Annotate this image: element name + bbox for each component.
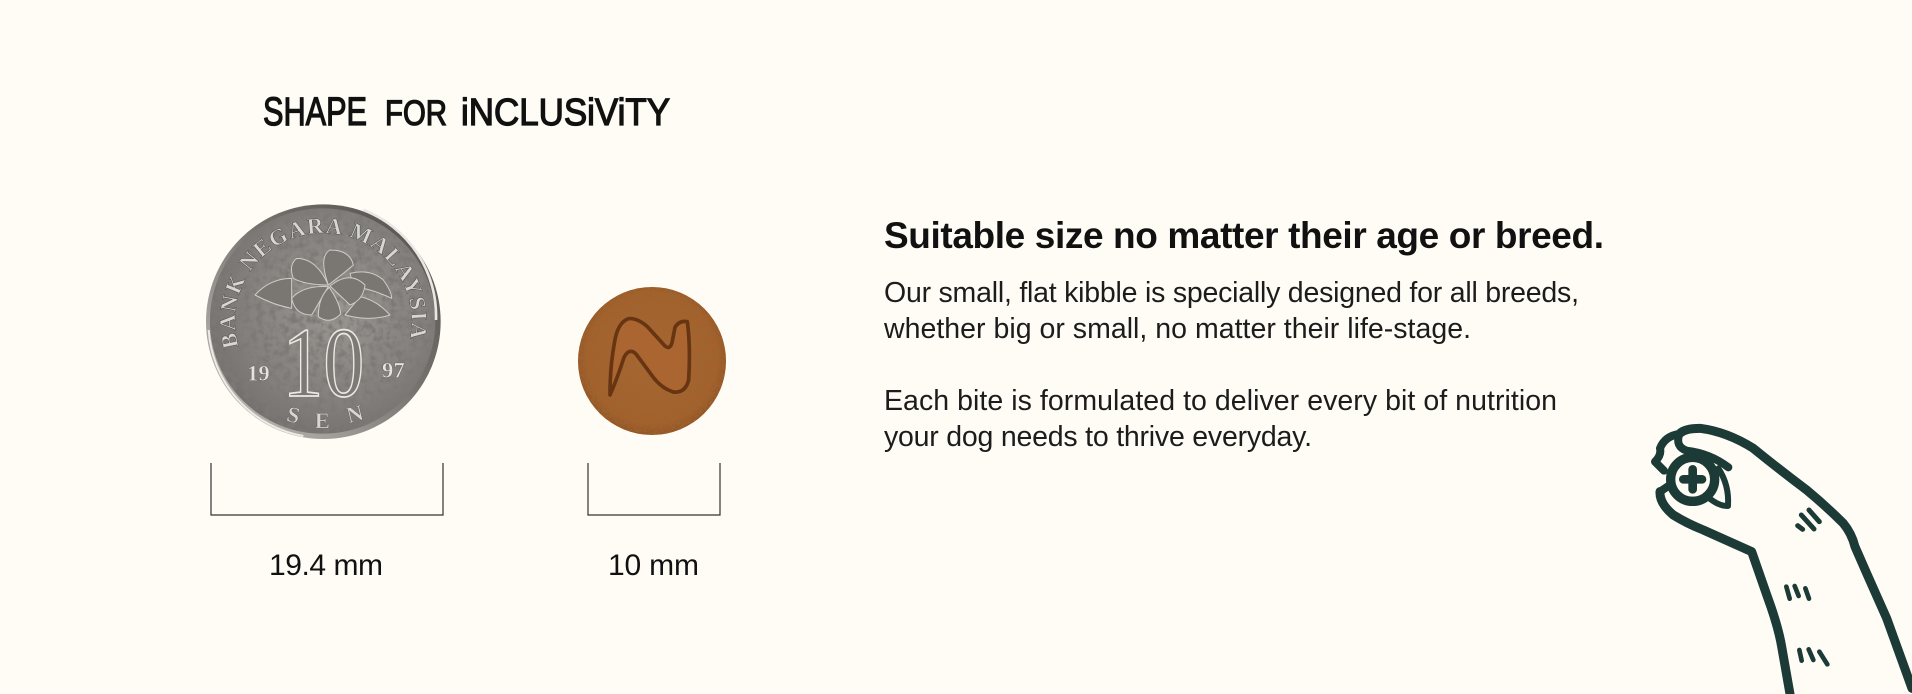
coin flower	[255, 250, 392, 320]
fur marks lower	[1799, 649, 1827, 664]
heading: Suitable size no matter their age or breed.	[884, 215, 1604, 256]
title	[263, 90, 670, 134]
title: iNCLUSiViTY	[461, 92, 670, 134]
title: SHAPE	[263, 90, 367, 134]
bracket: coin width	[211, 463, 443, 515]
toes	[1655, 434, 1728, 492]
fur marks upper	[1798, 510, 1819, 529]
label: 19.4 mm: 19.4 mm	[269, 549, 383, 582]
leg outline	[1680, 428, 1912, 688]
fur marks middle	[1786, 586, 1809, 599]
coin unit SEN: S	[284, 401, 303, 429]
photo: ten sen coin: 97	[382, 357, 405, 382]
held kibble	[1671, 457, 1715, 501]
body text: your dog needs to thrive everyday.	[884, 421, 1312, 453]
label: 10 mm: 10 mm	[608, 549, 699, 582]
bracket: kibble width	[588, 463, 720, 515]
illustration: dog leg holding kibble	[1655, 428, 1912, 694]
title: FOR	[385, 94, 447, 133]
coin denomination 10: 10	[282, 307, 364, 418]
body text: whether big or small, no matter their life-stage.	[883, 313, 1471, 345]
body text	[883, 277, 1579, 453]
coin unit SEN	[284, 400, 366, 433]
body text: Each bite is formulated to deliver every bit of nutrition	[884, 385, 1557, 417]
coin year: 19	[247, 361, 270, 386]
coin unit SEN: N	[344, 400, 366, 428]
coin inscription: BANK NEGARA MALAYSIA	[220, 218, 427, 350]
kibble embossed N	[610, 319, 689, 395]
body text: Our small, flat kibble is specially designed for all breeds,	[884, 277, 1579, 309]
photo: kibble	[578, 287, 726, 435]
photo: ten sen coin	[206, 204, 441, 439]
coin unit SEN: E	[315, 408, 330, 433]
kibble cross	[1683, 469, 1702, 489]
